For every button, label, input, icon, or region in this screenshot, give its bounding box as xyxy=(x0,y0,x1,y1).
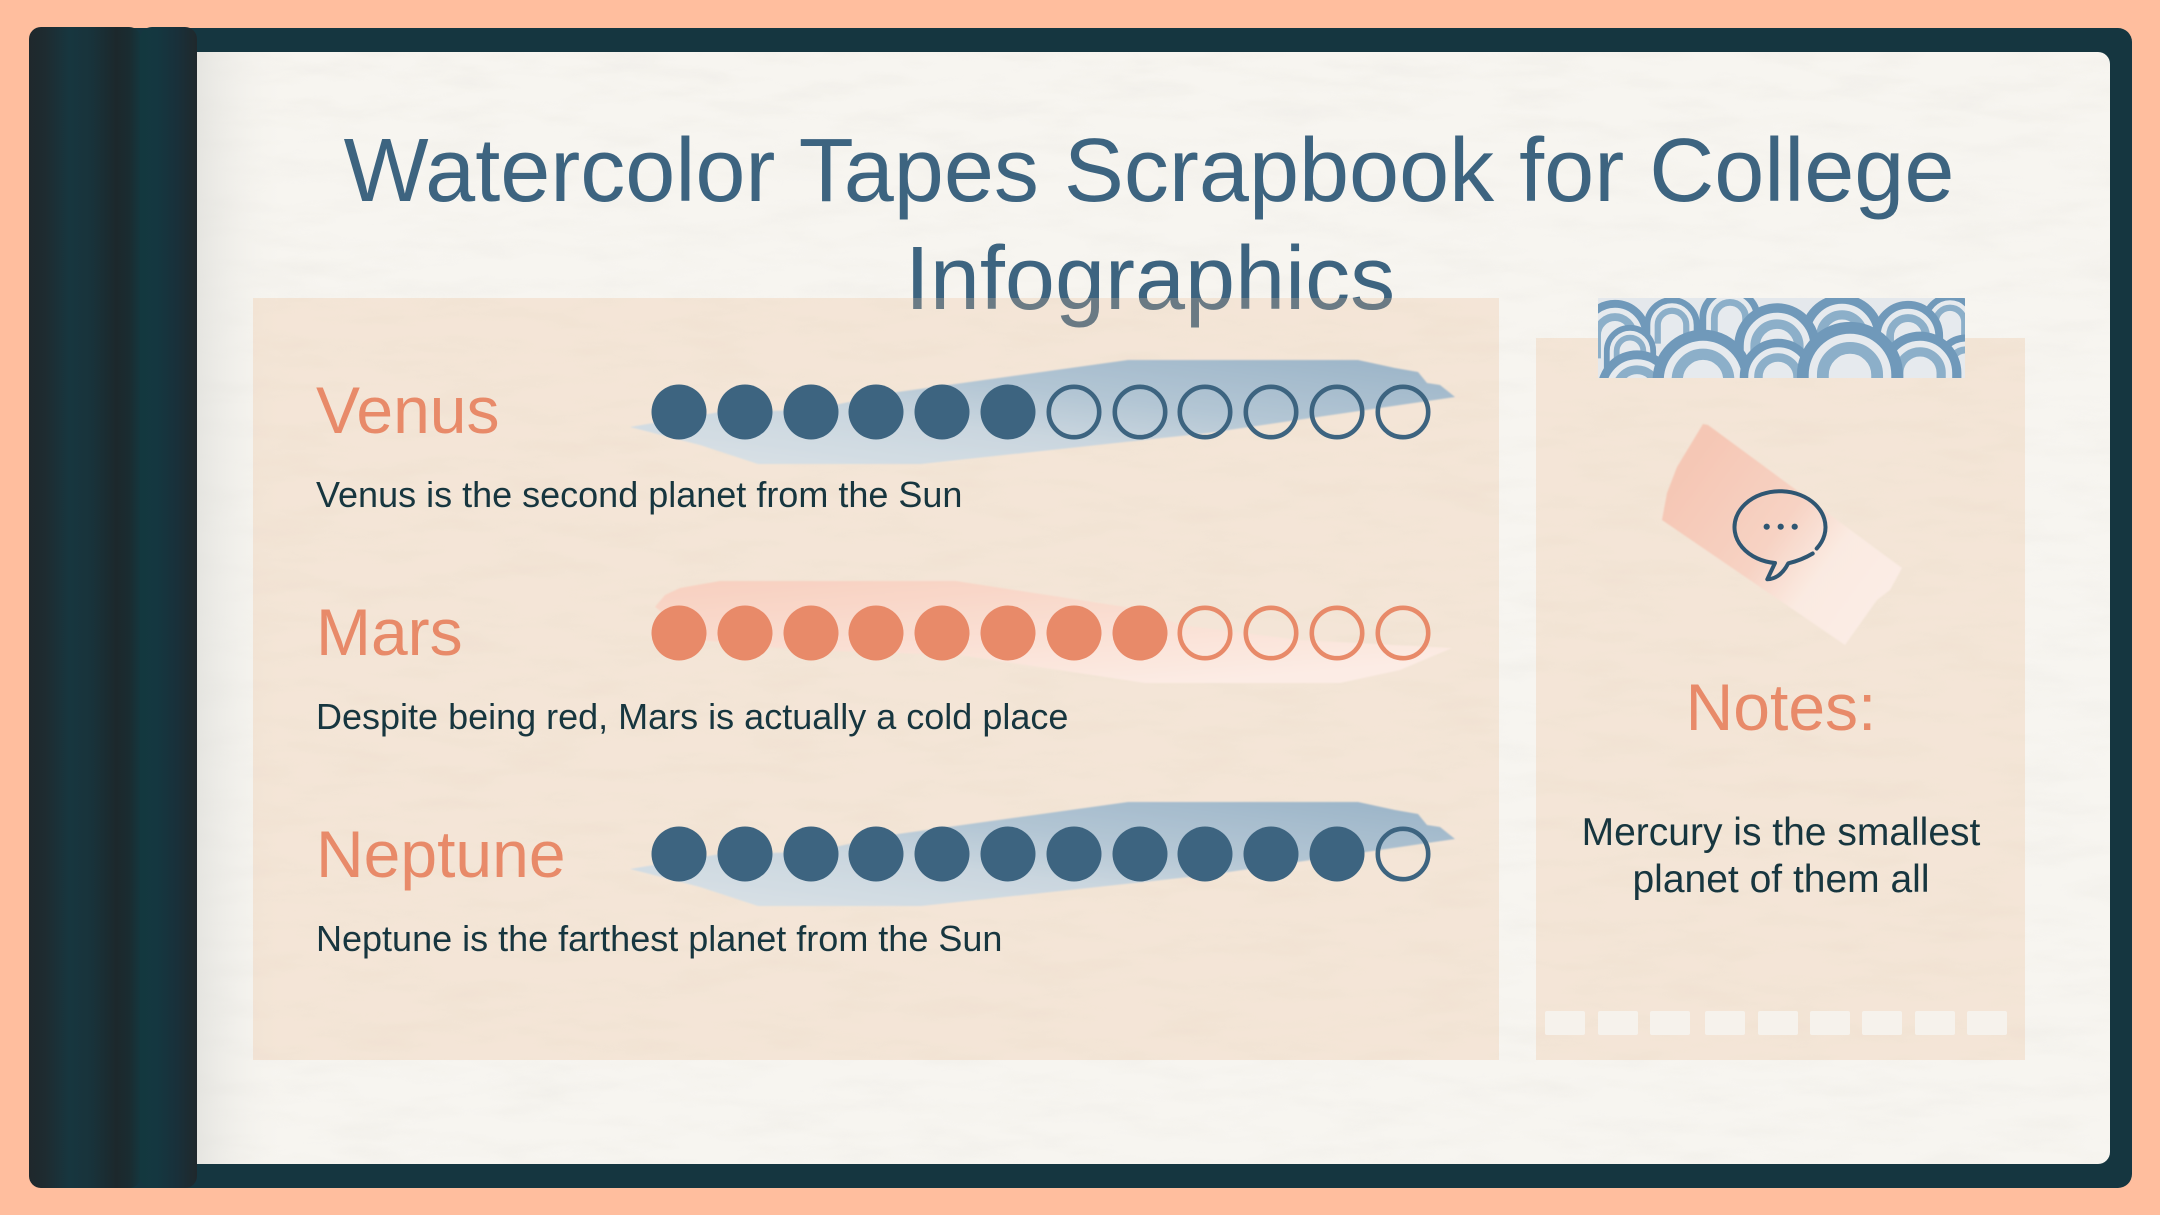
book spine xyxy=(29,27,197,1188)
Neptune rating dots xyxy=(652,826,1428,882)
title: Watercolor Tapes Scrapbook for College xyxy=(344,121,1954,221)
notes text: Mercury is the smallest xyxy=(1582,811,1981,854)
Mars description: Despite being red, Mars is actually a cold place xyxy=(316,696,1068,737)
title: Infographics xyxy=(905,229,1395,329)
notes text xyxy=(1582,811,1981,901)
title xyxy=(344,121,1954,329)
row: Venus xyxy=(316,360,1455,515)
Mars rating dots xyxy=(652,606,1428,660)
Venus brush stroke xyxy=(630,360,1455,464)
notes heading: Notes: xyxy=(1686,670,1876,744)
washi tape: scale pattern xyxy=(1598,298,1965,378)
perforated tape squares xyxy=(1545,1011,2007,1035)
Venus description: Venus is the second planet from the Sun xyxy=(316,474,962,515)
Neptune brush stroke xyxy=(630,802,1455,906)
Mars label: Mars xyxy=(316,595,463,669)
Venus rating dots xyxy=(652,384,1428,440)
notes text: planet of them all xyxy=(1632,858,1930,901)
Neptune description: Neptune is the farthest planet from the Sun xyxy=(316,918,1002,959)
pink tape xyxy=(1662,424,1902,645)
row: Neptune xyxy=(316,802,1455,959)
Neptune label: Neptune xyxy=(316,817,566,891)
panel: notes xyxy=(1536,338,2025,1060)
panel: planets xyxy=(253,298,1499,1060)
icon: speech bubble xyxy=(1735,491,1826,579)
row: Mars xyxy=(316,581,1452,737)
Mars brush stroke xyxy=(655,581,1452,683)
Venus label: Venus xyxy=(316,373,500,447)
